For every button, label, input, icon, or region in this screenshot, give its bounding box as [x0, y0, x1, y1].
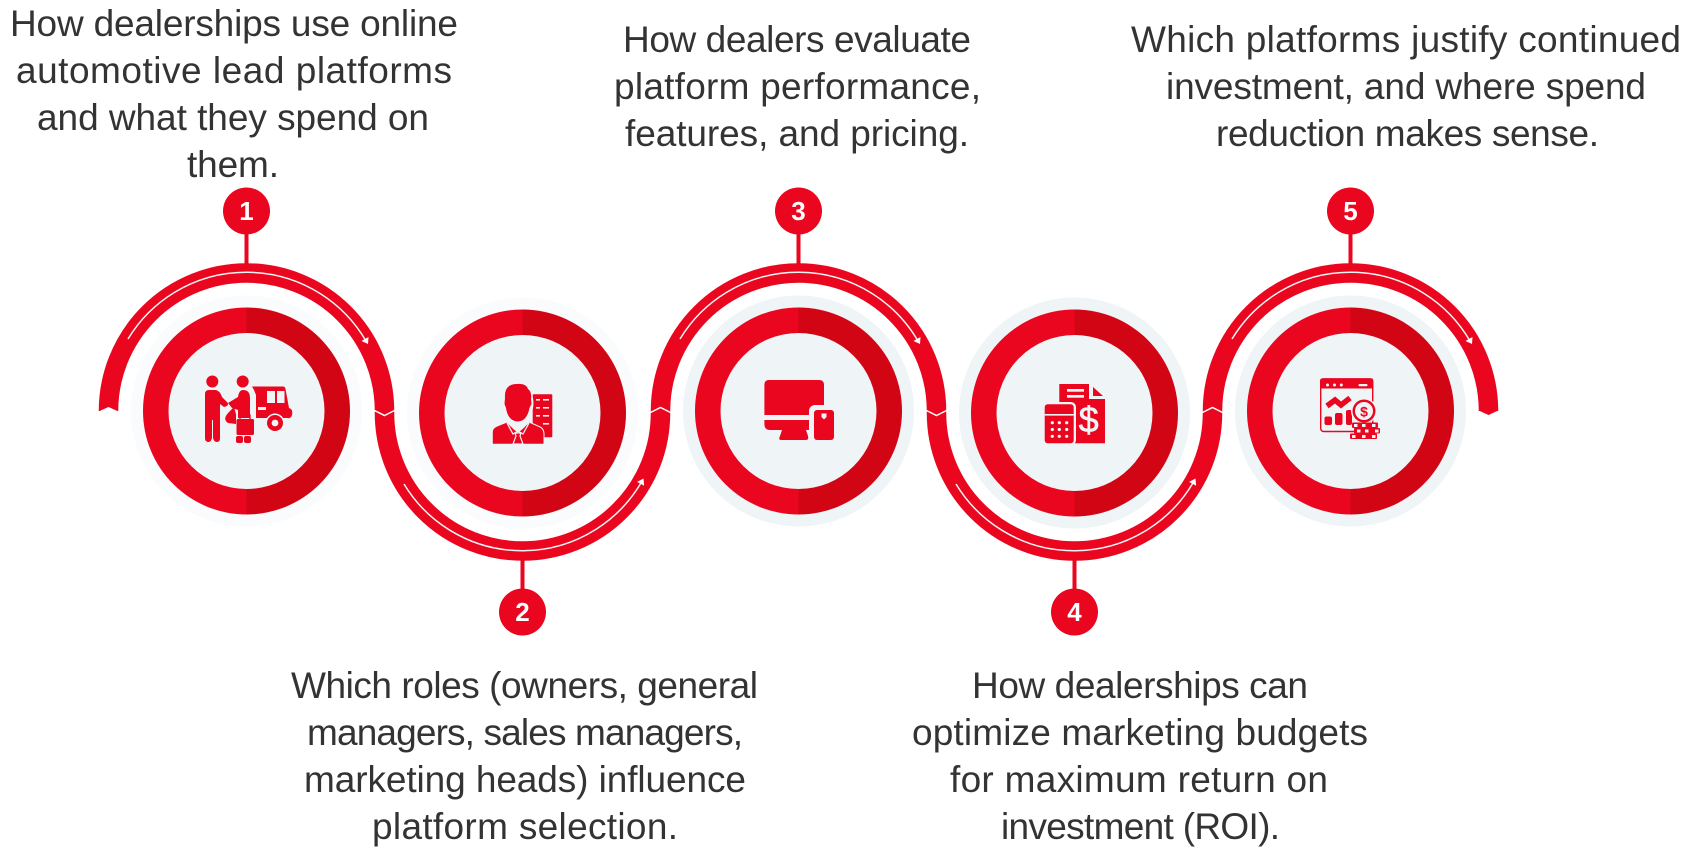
text: step 3 description: How dealers evaluate	[623, 19, 971, 60]
icon: businessman and office building	[492, 383, 552, 444]
step 2 ring	[407, 298, 638, 528]
text: step 1 description	[10, 3, 458, 185]
step 5 ring	[1235, 296, 1466, 526]
step 2 number badge: 2	[515, 597, 530, 627]
text: step 5 description	[1131, 19, 1681, 154]
arrow: top arc 5	[1232, 272, 1472, 344]
step 4 number badge: 4	[1067, 597, 1082, 627]
text: step 5 description: investment, and where spend	[1166, 66, 1646, 107]
step 5 number badge	[1327, 188, 1374, 264]
arrow: top arc 3	[680, 272, 920, 344]
step 3 ring	[683, 296, 914, 526]
step 1 number badge	[223, 188, 270, 264]
text: step 3 description: features, and pricing.	[625, 113, 969, 154]
icon: desktop monitor and device	[764, 380, 837, 443]
arrow: top arc 1	[128, 272, 368, 344]
serpentine ribbon connecting the five steps	[98, 273, 1498, 551]
step 4 ring	[959, 298, 1190, 528]
text: step 2 description: managers, sales managers,	[307, 712, 743, 753]
text: step 4 description: How dealerships can	[972, 665, 1308, 706]
text: step 4 description: optimize marketing budgets	[912, 712, 1368, 753]
text: step 2 description: Which roles (owners, general	[291, 665, 758, 706]
step 1 ring	[131, 296, 362, 526]
text: step 4 description	[912, 665, 1368, 847]
step 2 number badge	[499, 560, 546, 636]
icon: calculator and invoice with dollar sign	[1042, 384, 1105, 445]
arrow: bottom arc 4	[956, 478, 1196, 551]
step 1 number badge: 1	[239, 196, 254, 226]
text: step 5 description: reduction makes sense.	[1216, 113, 1599, 154]
icon: analytics window with coin stack: $	[1360, 404, 1368, 420]
icon: calculator and invoice with dollar sign: $	[1079, 399, 1099, 440]
step 3 number badge	[775, 188, 822, 264]
text: step 1 description: them.	[187, 144, 279, 185]
text: step 3 description: platform performance,	[614, 66, 981, 107]
step 4 number badge	[1051, 560, 1098, 636]
text: step 1 description: automotive lead platforms	[16, 50, 452, 91]
text: step 5 description: Which platforms justify continued	[1131, 19, 1681, 60]
text: step 2 description: platform selection.	[372, 806, 678, 847]
text: step 1 description: How dealerships use online	[10, 3, 458, 44]
icon: analytics window with coin stack	[1320, 378, 1380, 439]
text: step 4 description: investment (ROI).	[1001, 806, 1280, 847]
text: step 2 description: marketing heads) influence	[304, 759, 746, 800]
text: step 1 description: and what they spend on	[37, 97, 429, 138]
text: step 3 description	[614, 19, 981, 154]
icon: handshake with customer and car	[205, 376, 292, 443]
step 3 number badge: 3	[791, 196, 806, 226]
text: step 2 description	[291, 665, 758, 847]
step 5 number badge: 5	[1343, 196, 1358, 226]
text: step 4 description: for maximum return on	[950, 759, 1328, 800]
arrow: bottom arc 2	[404, 478, 644, 551]
